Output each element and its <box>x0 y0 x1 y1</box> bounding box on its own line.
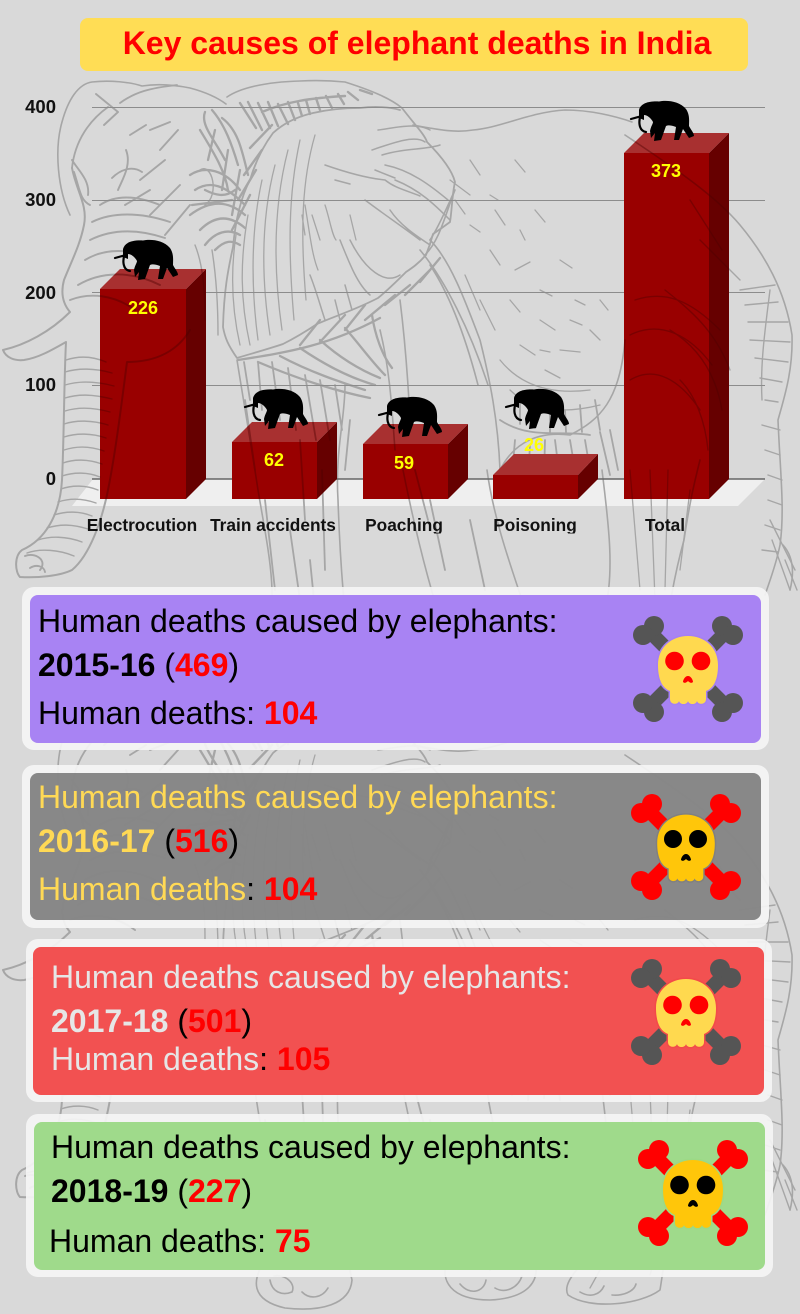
icon: elephant on Poisoning <box>506 389 569 429</box>
icon: elephant on Total <box>631 101 694 141</box>
chart floor <box>72 479 765 506</box>
panel: 2016-17 <box>22 765 769 928</box>
panel text: 2018-19 <box>49 1129 570 1259</box>
icon: elephant on Electrocution <box>115 240 178 280</box>
bar chart <box>25 100 765 534</box>
x axis line <box>92 478 765 480</box>
icon: skull and crossbones <box>633 616 743 722</box>
category labels <box>88 518 684 534</box>
bar value labels: 59 <box>394 453 414 473</box>
panel text: 2015-16: 2015-16 (469) <box>38 647 239 683</box>
y axis labels: 300 <box>25 189 56 210</box>
panel: 2018-19 <box>26 1114 773 1277</box>
panel text: 2018-19: 2018-19 (227) <box>51 1173 252 1209</box>
icon: skull and crossbones <box>631 794 741 900</box>
background elephant sketch: upper <box>3 81 797 689</box>
category labels: Electrocution <box>87 515 197 535</box>
category labels: Total <box>645 515 685 535</box>
y axis labels <box>25 96 56 489</box>
background elephant sketch: lower <box>3 701 797 1309</box>
panel text: 2016-17 <box>38 779 557 907</box>
title banner: Key causes of elephant deaths in India <box>123 25 712 61</box>
bar: Total <box>624 133 729 499</box>
sketch showing through bars <box>100 141 729 499</box>
icon: elephant on Poaching <box>379 397 442 437</box>
y axis labels: 0 <box>46 468 56 489</box>
panel text: 2018-19: Human deaths: 75 <box>49 1223 310 1259</box>
category labels: Poisoning <box>493 515 577 535</box>
panel text: 2016-17: 2016-17 (516) <box>38 823 239 859</box>
bar: Poisoning <box>493 454 598 499</box>
category labels: Poaching <box>365 515 443 535</box>
y axis labels: 100 <box>25 374 56 395</box>
panel text: 2016-17: Human deaths caused by elephants: <box>38 779 557 815</box>
y axis labels: 200 <box>25 282 56 303</box>
panel text: 2015-16: Human deaths: 104 <box>38 695 318 731</box>
icon: elephant on Train accidents <box>245 389 308 429</box>
bar value labels <box>128 161 681 473</box>
panel text: 2017-18: 2017-18 (501) <box>51 1003 252 1039</box>
bar value labels: 226 <box>128 298 158 318</box>
icon: skull and crossbones <box>631 959 741 1065</box>
bar value labels: 62 <box>264 450 284 470</box>
panel: 2017-18 <box>26 939 772 1102</box>
panel text: 2017-18: Human deaths caused by elephants: <box>51 959 570 995</box>
panel text: 2017-18 <box>51 959 570 1077</box>
panel text: 2015-16 <box>38 603 557 731</box>
title banner <box>80 18 748 71</box>
bar: Poaching <box>363 424 468 499</box>
bar: Electrocution <box>100 269 206 499</box>
icon: skull and crossbones <box>638 1140 748 1246</box>
panel text: 2015-16: Human deaths caused by elephants: <box>38 603 557 639</box>
panel text: 2018-19: Human deaths caused by elephants: <box>51 1129 570 1165</box>
bar value labels: 373 <box>651 161 681 181</box>
panel text: 2016-17: Human deaths: 104 <box>38 871 318 907</box>
bar: Train accidents <box>232 422 337 499</box>
bar value labels: 26 <box>524 435 544 455</box>
y axis labels: 400 <box>25 96 56 117</box>
gridlines <box>92 108 765 386</box>
panel text: 2017-18: Human deaths: 105 <box>51 1041 330 1077</box>
panel: 2015-16 <box>22 587 769 750</box>
category labels: Train accidents <box>210 515 336 535</box>
